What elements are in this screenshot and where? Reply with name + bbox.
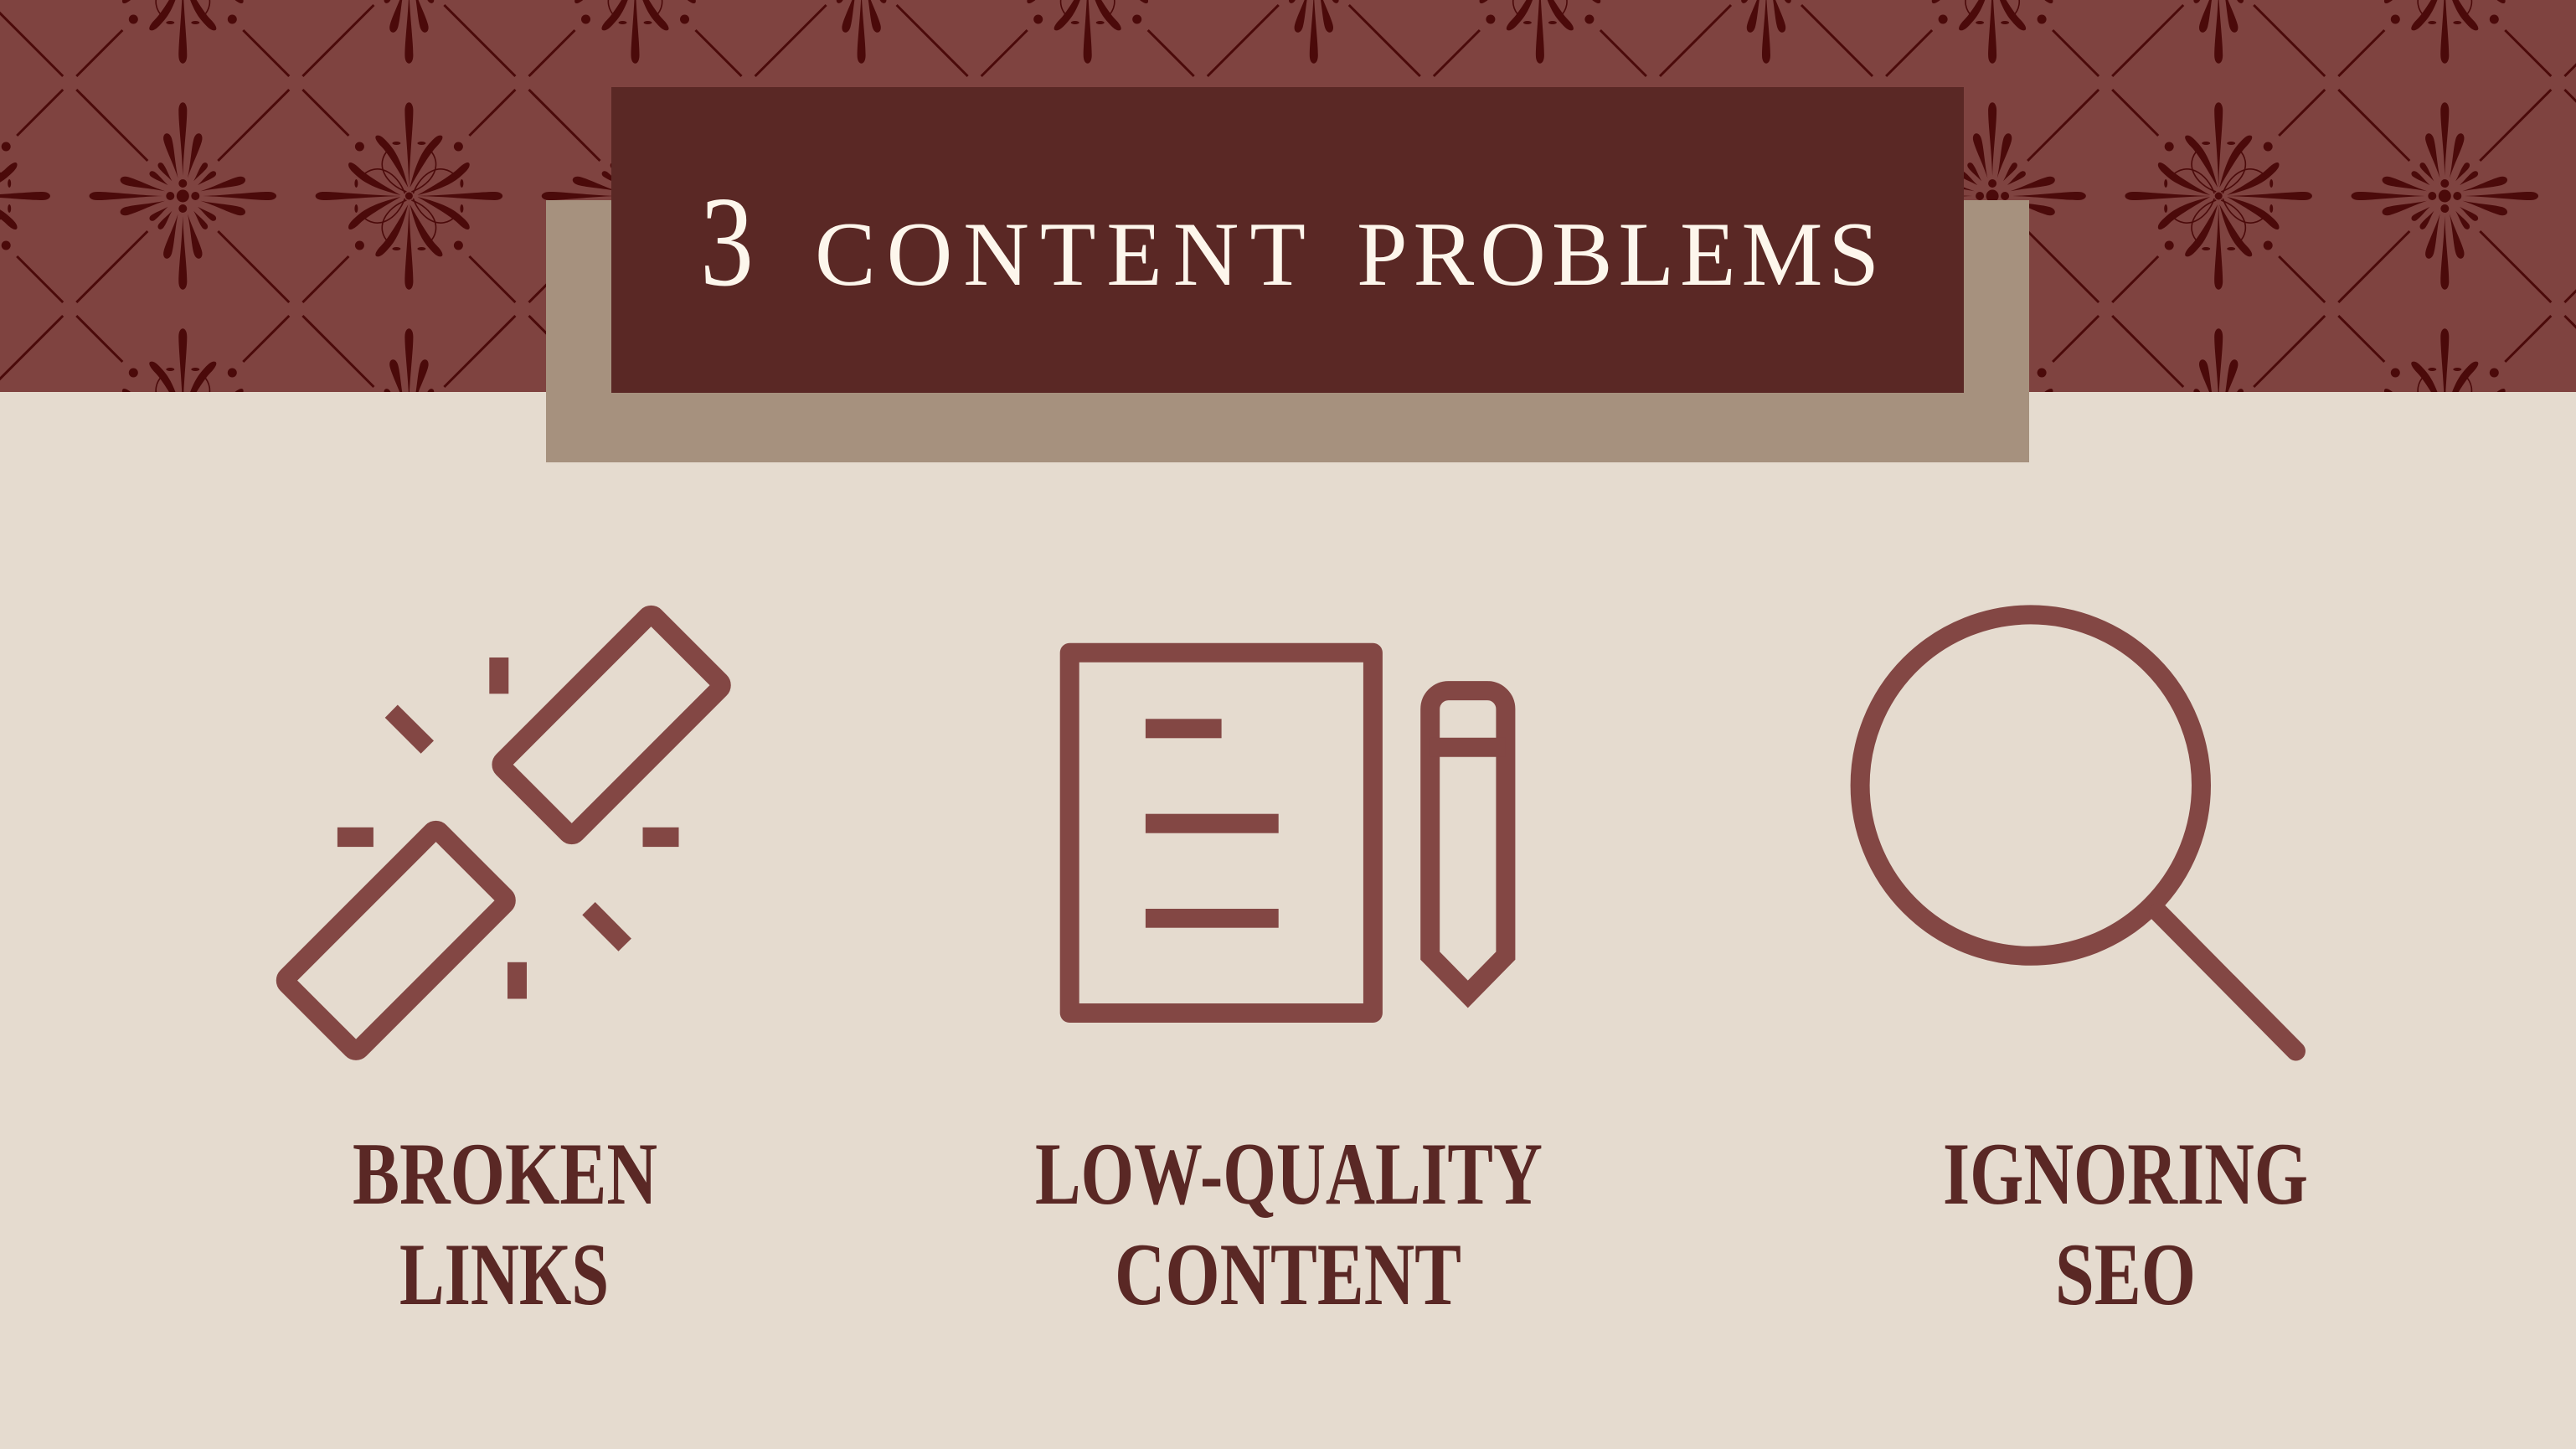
label: broken links: BROKEN <box>353 1125 657 1223</box>
icon: magnifying glass <box>1860 615 2296 1051</box>
label: broken links <box>353 1125 657 1323</box>
title backing panel <box>546 200 2029 462</box>
title: PROBLEMS <box>1357 204 1879 305</box>
icon: broken link <box>284 613 724 1053</box>
label: broken links: LINKS <box>399 1225 609 1323</box>
label: ignoring seo: SEO <box>2055 1225 2196 1323</box>
label: low-quality content <box>1035 1125 1543 1323</box>
icon: document and pencil <box>1069 652 1506 1013</box>
patterned header band <box>0 0 2576 392</box>
label: ignoring seo: IGNORING <box>1943 1125 2308 1223</box>
title: 3 <box>700 171 754 313</box>
title <box>700 171 1879 313</box>
label: low-quality content: LOW-QUALITY <box>1035 1125 1543 1223</box>
title panel <box>611 87 1964 393</box>
label: low-quality content: CONTENT <box>1115 1225 1461 1323</box>
title: CONTENT <box>815 204 1306 305</box>
label: ignoring seo <box>1943 1125 2308 1323</box>
